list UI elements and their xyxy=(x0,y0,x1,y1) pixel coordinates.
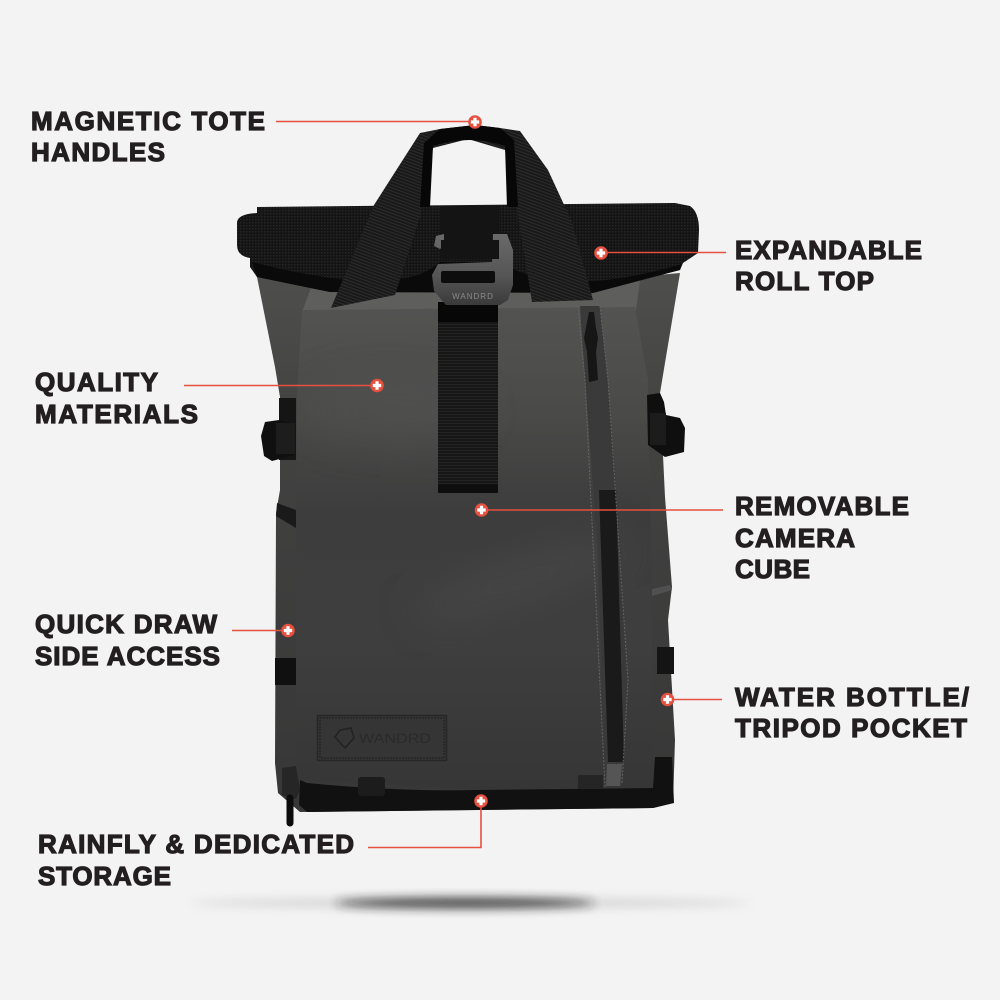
callout: quick draw side access xyxy=(35,609,295,671)
callout: magnetic tote handles xyxy=(31,106,482,167)
callout: quick draw side access: SIDE ACCESS xyxy=(35,641,220,671)
callout: quality materials: MATERIALS xyxy=(35,399,198,429)
callout: quality materials: QUALITY xyxy=(35,367,158,397)
callout: rainfly and dedicated storage xyxy=(38,794,488,891)
right lower strap xyxy=(657,647,674,674)
tote handles xyxy=(331,125,593,308)
callout: removable camera cube xyxy=(475,491,909,584)
zipper cord xyxy=(286,798,294,823)
buckle wordmark: WANDRD xyxy=(452,292,494,301)
callout: magnetic tote handles: HANDLES xyxy=(31,137,165,167)
callout: removable camera cube: CUBE xyxy=(735,554,810,584)
callout: magnetic tote handles: MAGNETIC TOTE xyxy=(31,106,265,136)
bottom base xyxy=(282,757,674,812)
backpack xyxy=(237,125,699,823)
callout: removable camera cube: CAMERA xyxy=(735,523,855,553)
callout: removable camera cube: REMOVABLE xyxy=(735,491,909,521)
callout: expandable roll top: ROLL TOP xyxy=(735,266,874,296)
patch wordmark: WANDRD xyxy=(359,730,431,746)
callout: water bottle tripod pocket: TRIPOD POCKET xyxy=(735,713,967,743)
callout: water bottle tripod pocket: WATER BOTTLE/ xyxy=(735,682,969,712)
callout: water bottle tripod pocket xyxy=(661,682,969,743)
callout: rainfly and dedicated storage: STORAGE xyxy=(38,861,171,891)
callout: quality materials xyxy=(35,367,384,429)
brand patch xyxy=(318,716,446,760)
front strap xyxy=(438,302,498,493)
left side buckle xyxy=(261,398,296,461)
left lower strap xyxy=(275,658,296,685)
callout: expandable roll top xyxy=(594,235,922,296)
ground shadow xyxy=(190,898,750,908)
zipper xyxy=(578,306,628,787)
roll top xyxy=(237,203,699,293)
side and main body xyxy=(257,273,680,812)
callout: expandable roll top: EXPANDABLE xyxy=(735,235,922,265)
patch logo xyxy=(335,728,354,748)
left pocket edge xyxy=(276,503,296,528)
callout: rainfly and dedicated storage: RAINFLY & DEDICATED xyxy=(38,829,354,859)
right side buckle xyxy=(647,393,685,457)
front panel xyxy=(302,307,636,444)
pale band under roll top xyxy=(302,280,640,312)
right pocket edge xyxy=(652,585,672,596)
buckle xyxy=(432,206,513,305)
callout: quick draw side access: QUICK DRAW xyxy=(35,609,217,639)
